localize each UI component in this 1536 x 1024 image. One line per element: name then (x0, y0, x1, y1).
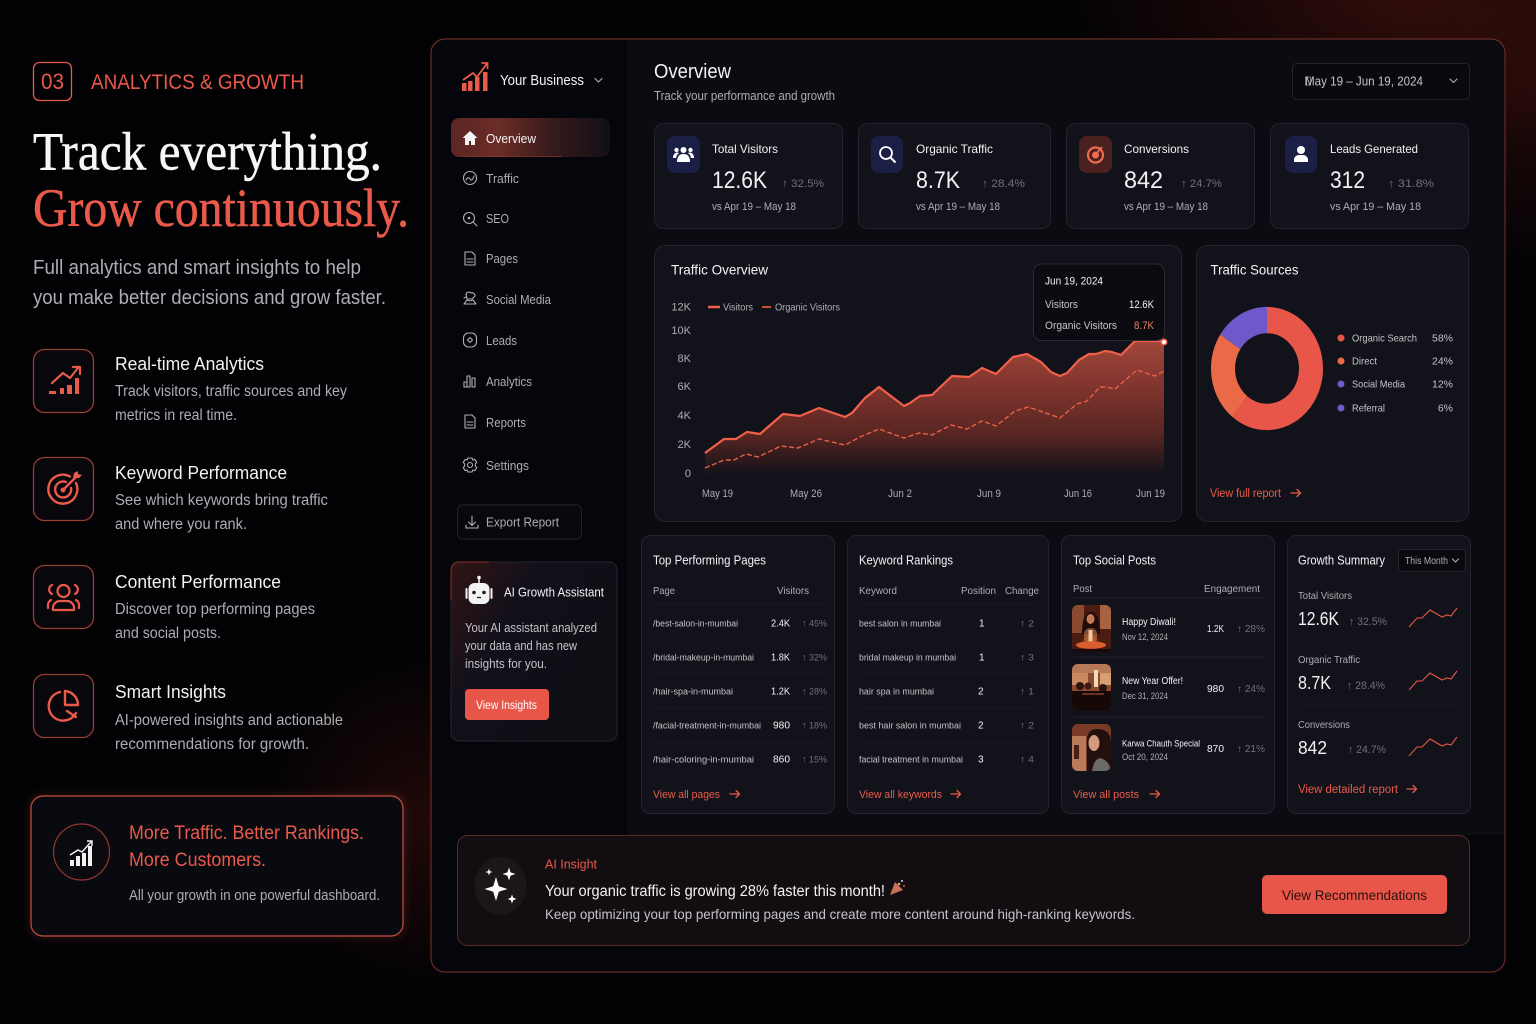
panel: keyword rankings: Keyword (859, 585, 897, 597)
tooltip (1034, 264, 1164, 340)
headline (33, 120, 409, 238)
panel: traffic overview chart: Traffic Overview (671, 262, 769, 278)
y axis (671, 302, 692, 480)
icon: robot (466, 576, 492, 604)
icon: target (34, 458, 94, 520)
nav: other items: Reports (486, 416, 526, 430)
feature: Real-time Analytics: metrics in real time. (115, 407, 237, 424)
nav: other items (463, 172, 551, 473)
panel: top social posts: Top Social Posts (1073, 554, 1156, 568)
panel: growth summary (1288, 536, 1470, 814)
x axis: May 26 (790, 488, 822, 500)
legend (708, 302, 840, 314)
link: view all posts: View all posts (1073, 789, 1139, 801)
panel: top social posts: Engagement (1204, 583, 1260, 595)
callout: more traffic: More Traffic. Better Rankings. (129, 823, 364, 844)
subhead: you make better decisions and grow faster. (33, 286, 386, 309)
date picker: May 19 – Jun 19, 2024 (1305, 74, 1423, 88)
link: view full report: View full report (1210, 488, 1282, 500)
panel: keyword rankings (848, 536, 1048, 814)
AI insight banner: AI Insight (545, 858, 598, 872)
icon: people (34, 566, 94, 628)
donut legend: 12% (1432, 378, 1453, 390)
section badge: 03 (34, 62, 72, 100)
nav: other items: Analytics (486, 375, 532, 389)
panel: keyword rankings: Change (1005, 585, 1039, 597)
feature: Keyword Performance: and where you rank. (115, 516, 247, 533)
icon: visitors (667, 136, 700, 173)
export report button: Export Report (486, 516, 559, 530)
metric: total visitors: Total Visitors (1298, 590, 1352, 602)
table rows (859, 618, 1034, 766)
y axis: 0 (685, 468, 691, 480)
section label: ANALYTICS & GROWTH (91, 71, 304, 94)
panel: keyword rankings: Position (961, 585, 996, 597)
metric: organic traffic (1298, 654, 1457, 693)
table rows: ↑ 32% (802, 652, 828, 664)
legend: Organic Visitors (775, 302, 840, 314)
y axis: 2K (678, 439, 692, 451)
nav: Overview: Overview (486, 132, 537, 146)
nav: other items: Social Media (486, 293, 551, 307)
y axis: 4K (678, 410, 692, 422)
panel: top performing pages (642, 536, 834, 814)
table rows: 2 (978, 686, 984, 698)
nav: other items: Pages (486, 252, 518, 266)
KPI: Leads Generated: 312 (1330, 167, 1365, 194)
table rows: /hair-coloring-in-mumbai (653, 754, 754, 766)
table rows: ↑ 1 (1020, 686, 1034, 698)
KPI: Organic Traffic: Organic Traffic (916, 142, 993, 156)
KPI: Total Visitors: 12.6K (712, 167, 767, 194)
tooltip: 12.6K (1129, 299, 1155, 311)
header (654, 61, 835, 103)
nav: other items: Leads (486, 334, 517, 348)
metric: organic traffic: 8.7K (1298, 673, 1331, 693)
feature: Content Performance: and social posts. (115, 625, 221, 642)
KPI: Total Visitors (654, 124, 842, 228)
KPI: Total Visitors: Total Visitors (712, 142, 778, 156)
donut legend: 6% (1438, 402, 1453, 414)
table rows: 1.2K (771, 686, 790, 698)
donut legend: Direct (1352, 356, 1377, 368)
KPI: Conversions: ↑ 24.7% (1181, 178, 1222, 190)
panel: top performing pages: Top Performing Pages (653, 554, 766, 568)
panel: top social posts: Happy Diwali! (1122, 617, 1176, 628)
feature: Smart Insights: Smart Insights (115, 681, 226, 702)
icon: sparkles (474, 857, 526, 915)
KPI: Conversions: 842 (1124, 167, 1163, 194)
headline: Track everything. (33, 120, 382, 182)
metric: total visitors: ↑ 32.5% (1349, 616, 1387, 628)
panel: top performing pages: Page (653, 585, 675, 597)
table rows: /best-salon-in-mumbai (653, 618, 738, 630)
icon: search (871, 136, 903, 173)
metric: conversions (1298, 719, 1457, 758)
subhead: Full analytics and smart insights to help (33, 256, 361, 279)
callout: more traffic: More Customers. (129, 850, 266, 871)
KPI: Organic Traffic: 8.7K (916, 167, 960, 194)
panel: top social posts (1062, 536, 1274, 814)
header: Overview (654, 61, 732, 83)
feature: Keyword Performance: Keyword Performance (115, 462, 287, 483)
logo: Your Business (500, 73, 584, 89)
AI growth assistant card: Your AI assistant analyzed (465, 621, 597, 635)
table rows: /facial-treatment-in-mumbai (653, 720, 761, 732)
y axis: 10K (671, 325, 692, 337)
panel: traffic sources (1196, 246, 1468, 522)
view recommendations button: View Recommendations (1282, 887, 1427, 903)
AI insight banner: Your organic traffic is growing 28% faster this month! (545, 883, 885, 900)
metric: conversions: Conversions (1298, 719, 1350, 731)
table rows (653, 618, 828, 766)
metric: organic traffic: Organic Traffic (1298, 654, 1360, 666)
table rows: hair spa in mumbai (859, 686, 934, 698)
panel: top social posts: ↑ 21% (1237, 744, 1265, 755)
table rows: best hair salon in mumbai (859, 720, 961, 732)
nav: other items: Settings (486, 459, 529, 473)
AI growth assistant card (451, 562, 617, 741)
panel: traffic overview chart (654, 246, 1182, 522)
KPI: Organic Traffic: ↑ 28.4% (982, 178, 1025, 190)
link: view detailed report: View detailed report (1298, 784, 1399, 796)
table rows: ↑ 15% (802, 754, 828, 766)
KPI: Total Visitors: ↑ 32.5% (782, 178, 824, 190)
x axis: May 19 (702, 488, 733, 500)
table rows: ↑ 18% (802, 720, 828, 732)
sidebar (451, 63, 617, 741)
header: Track your performance and growth (654, 89, 835, 103)
KPI: Conversions: Conversions (1124, 142, 1189, 156)
feature: Content Performance: Discover top performing pages (115, 601, 315, 618)
feature: Content Performance (34, 566, 315, 642)
table rows: 3 (978, 754, 984, 766)
donut legend: Social Media (1352, 378, 1405, 390)
area and lines (705, 339, 1167, 473)
panel: top social posts: ↑ 24% (1237, 684, 1265, 695)
donut chart (1223, 320, 1311, 417)
table rows: ↑ 2 (1020, 618, 1034, 630)
metric: conversions: 842 (1298, 738, 1327, 758)
panel: top social posts: 980 (1207, 683, 1224, 695)
table rows: facial treatment in mumbai (859, 754, 963, 766)
AI insight banner: Keep optimizing your top performing pages and create more content around high-ranking keywords. (545, 906, 1135, 922)
dashboard panel (431, 39, 1505, 972)
feature: Smart Insights: recommendations for growth. (115, 736, 309, 753)
KPI: Leads Generated: vs Apr 19 – May 18 (1330, 201, 1421, 213)
view recommendations button (1262, 875, 1447, 914)
table rows: 1.8K (771, 652, 790, 664)
KPI: Organic Traffic: vs Apr 19 – May 18 (916, 201, 1000, 213)
KPI: Organic Traffic (858, 124, 1050, 228)
link: view all pages: View all pages (653, 789, 720, 801)
feature: Keyword Performance: See which keywords bring traffic (115, 492, 328, 509)
subhead (33, 256, 386, 309)
panel: traffic sources: Traffic Sources (1210, 262, 1298, 278)
view insights button: View Insights (476, 700, 537, 712)
image: new year post (1072, 664, 1111, 711)
table rows: 2 (978, 720, 984, 732)
table rows: ↑ 4 (1020, 754, 1034, 766)
date picker (1292, 64, 1470, 100)
period dropdown (1398, 550, 1466, 572)
table rows: best salon in mumbai (859, 618, 941, 630)
panel: top performing pages: Visitors (777, 585, 809, 597)
donut legend (1338, 332, 1453, 414)
metric: organic traffic: ↑ 28.4% (1347, 680, 1385, 692)
KPI: Leads Generated (1270, 124, 1468, 228)
donut legend: 58% (1432, 332, 1453, 344)
table rows: 860 (773, 754, 790, 766)
nav: other items: Traffic (486, 172, 519, 186)
tooltip: 8.7K (1134, 320, 1155, 332)
x axis: Jun 9 (977, 488, 1001, 500)
table rows: ↑ 45% (802, 618, 828, 630)
callout: more traffic (31, 796, 403, 936)
donut legend: Organic Search (1352, 332, 1417, 344)
panel: top social posts: Oct 20, 2024 (1122, 752, 1168, 763)
KPI: Conversions (1066, 124, 1254, 228)
icon: person (1285, 136, 1317, 173)
metric: total visitors (1298, 590, 1457, 629)
table rows: 1 (979, 652, 985, 664)
panel: top social posts: Dec 31, 2024 (1122, 691, 1168, 702)
y axis: 12K (671, 302, 692, 314)
callout: more traffic: All your growth in one powerful dashboard. (129, 888, 380, 904)
KPI: Leads Generated: Leads Generated (1330, 142, 1418, 156)
table rows: 980 (773, 720, 790, 732)
donut legend: Referral (1352, 402, 1385, 414)
panel: top social posts: 870 (1207, 743, 1224, 755)
view insights button (465, 689, 549, 720)
icon: chart in circle (54, 824, 110, 880)
period dropdown: This Month (1405, 556, 1448, 567)
feature: Real-time Analytics (34, 350, 347, 424)
table rows: /hair-spa-in-mumbai (653, 686, 733, 698)
panel: top social posts: Post (1073, 583, 1092, 595)
KPI: Leads Generated: ↑ 31.8% (1388, 178, 1434, 190)
icon: pie chart (34, 674, 94, 738)
panel: top social posts: New Year Offer! (1122, 676, 1183, 687)
feature: Keyword Performance (34, 458, 328, 533)
legend: Visitors (723, 302, 753, 314)
AI growth assistant card: AI Growth Assistant (504, 586, 604, 600)
panel: keyword rankings: Keyword Rankings (859, 554, 953, 568)
AI growth assistant card: your data and has new (465, 639, 578, 653)
tooltip: Organic Visitors (1045, 320, 1117, 332)
image: karwa chauth post (1072, 724, 1111, 771)
nav: Overview (451, 118, 610, 157)
panel: top social posts: Nov 12, 2024 (1122, 632, 1168, 643)
table rows: 2.4K (771, 618, 790, 630)
nav: other items: SEO (486, 212, 509, 226)
feature: Smart Insights (34, 674, 343, 753)
headline: Grow continuously. (33, 177, 409, 238)
icon: target (1079, 136, 1112, 173)
feature: Real-time Analytics: Real-time Analytics (115, 353, 264, 374)
image: diwali post (1072, 605, 1111, 652)
link: view all keywords: View all keywords (859, 789, 942, 801)
table rows: 1 (979, 618, 985, 630)
donut legend: 24% (1432, 356, 1453, 368)
x axis (702, 488, 1165, 500)
tooltip: Jun 19, 2024 (1045, 276, 1103, 288)
AI growth assistant card: insights for you. (465, 657, 547, 671)
panel: top social posts: 1.2K (1207, 623, 1224, 635)
icon: rising chart (34, 350, 94, 412)
panel: growth summary: Growth Summary (1298, 554, 1386, 568)
icon: party popper (890, 880, 905, 895)
metric: total visitors: 12.6K (1298, 609, 1339, 629)
feature: Real-time Analytics: Track visitors, traffic sources and key (115, 383, 347, 400)
section badge: 03: 03 (41, 69, 64, 94)
x axis: Jun 16 (1064, 488, 1092, 500)
export report button (458, 505, 582, 539)
logo (462, 63, 602, 91)
y axis: 8K (678, 353, 692, 365)
KPI: Conversions: vs Apr 19 – May 18 (1124, 201, 1208, 213)
table rows: bridal makeup in mumbai (859, 652, 956, 664)
table rows: ↑ 3 (1020, 652, 1034, 664)
table rows: /bridal-makeup-in-mumbai (653, 652, 754, 664)
panel: top social posts: ↑ 28% (1237, 624, 1265, 635)
metric: conversions: ↑ 24.7% (1348, 744, 1386, 756)
tooltip: Visitors (1045, 299, 1078, 311)
y axis: 6K (678, 381, 692, 393)
feature: Smart Insights: AI-powered insights and actionable (115, 712, 343, 729)
table rows: ↑ 2 (1020, 720, 1034, 732)
x axis: Jun 2 (888, 488, 912, 500)
panel: top social posts: Karwa Chauth Special (1122, 738, 1200, 750)
feature: Content Performance: Content Performance (115, 571, 281, 592)
KPI: Total Visitors: vs Apr 19 – May 18 (712, 201, 796, 213)
x axis: Jun 19 (1136, 488, 1165, 500)
table rows: ↑ 28% (802, 686, 828, 698)
AI insight banner (458, 836, 1470, 946)
